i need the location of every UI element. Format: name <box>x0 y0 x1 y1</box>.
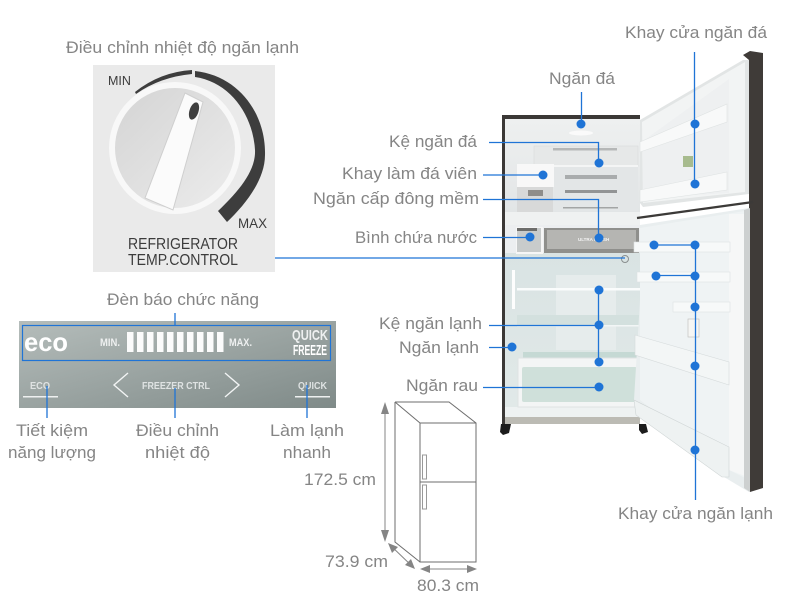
panel: control panel: MIN. <box>100 337 120 349</box>
label: door tray fridge <box>618 240 773 523</box>
label: temperature adjust <box>136 421 219 462</box>
dial labels <box>108 74 268 269</box>
panel: control panel: QUICK <box>292 327 328 344</box>
dial labels: MIN <box>108 74 131 88</box>
photo: open refrigerator <box>500 51 763 492</box>
panel: control panel: eco <box>24 327 68 357</box>
upper door <box>640 60 749 207</box>
panel: control panel <box>19 321 336 408</box>
label: fridge shelf: Kệ ngăn lạnh <box>379 314 482 333</box>
arrow: decrease <box>114 373 128 397</box>
panel: control panel: FREEZE <box>293 342 327 359</box>
dial arc <box>135 70 265 222</box>
label: ice tray: Khay làm đá viên <box>342 164 477 183</box>
panel: control panel: ECO <box>30 381 50 392</box>
label: soft freeze compartment <box>313 189 604 242</box>
dimension arrows <box>381 402 477 573</box>
panel: temperature dial <box>93 65 275 272</box>
label: vegetable drawer <box>406 376 604 395</box>
lower door <box>634 208 750 492</box>
label: quick cooling: nhanh <box>283 443 331 462</box>
label: freezer shelf <box>389 132 604 168</box>
label: quick cooling <box>270 421 344 462</box>
leader: fridge control to dial <box>275 257 625 259</box>
heading: freezer temperature dial: Điều chỉnh nhiệt độ ngăn lạnh <box>66 38 299 57</box>
label: energy saving: năng lượng <box>8 443 96 462</box>
dimension: width: 80.3 cm <box>417 576 479 595</box>
label: door tray freezer <box>625 23 768 188</box>
panel: control panel: FREEZER CTRL <box>142 381 210 392</box>
door gap hinge <box>637 202 753 218</box>
arrow: increase <box>225 373 239 397</box>
dark door edge <box>743 51 763 492</box>
fridge interior <box>512 270 640 407</box>
dial labels: REFRIGERATOR <box>128 236 238 253</box>
label: freezer compartment: Ngăn đá <box>549 69 616 88</box>
label: door tray fridge: Khay cửa ngăn lạnh <box>618 504 773 523</box>
label: fridge compartment <box>399 338 516 357</box>
control panel leader lines <box>47 313 307 418</box>
heading: function indicator: Đèn báo chức năng <box>107 290 259 309</box>
label: freezer shelf: Kệ ngăn đá <box>389 132 478 151</box>
label: vegetable drawer: Ngăn rau <box>406 376 478 395</box>
label: ice tray <box>342 164 548 183</box>
dial handle <box>145 93 203 210</box>
label: quick cooling: Làm lạnh <box>270 421 344 440</box>
label: energy saving: Tiết kiệm <box>16 421 88 440</box>
drawers <box>516 227 639 262</box>
label: fridge compartment: Ngăn lạnh <box>399 338 479 357</box>
dimension: depth: 73.9 cm <box>325 552 388 571</box>
drawers: ULTRA FRESH <box>578 237 609 242</box>
label: temperature adjust: Điều chỉnh <box>136 421 219 440</box>
dial labels: MAX <box>238 215 268 231</box>
diagram: fridge dimensions <box>304 402 479 595</box>
label: energy saving <box>8 421 96 462</box>
freezer interior <box>517 130 638 212</box>
label: freezer compartment <box>549 69 616 128</box>
label: temperature adjust: nhiệt độ <box>145 443 210 462</box>
indicator bars <box>127 332 224 352</box>
label: water tank: Bình chứa nước <box>355 228 477 247</box>
panel: control panel: QUICK <box>298 381 328 392</box>
cabinet body <box>502 115 640 424</box>
label: soft freeze compartment: Ngăn cấp đông mềm <box>313 189 479 208</box>
label: door tray freezer: Khay cửa ngăn đá <box>625 23 768 42</box>
dimension: height: 172.5 cm <box>304 470 376 489</box>
feet <box>500 424 648 435</box>
label: fridge shelf <box>379 286 604 366</box>
panel: control panel: MAX. <box>229 337 252 349</box>
label: water tank <box>355 228 534 247</box>
dial labels: TEMP.CONTROL <box>128 252 238 269</box>
